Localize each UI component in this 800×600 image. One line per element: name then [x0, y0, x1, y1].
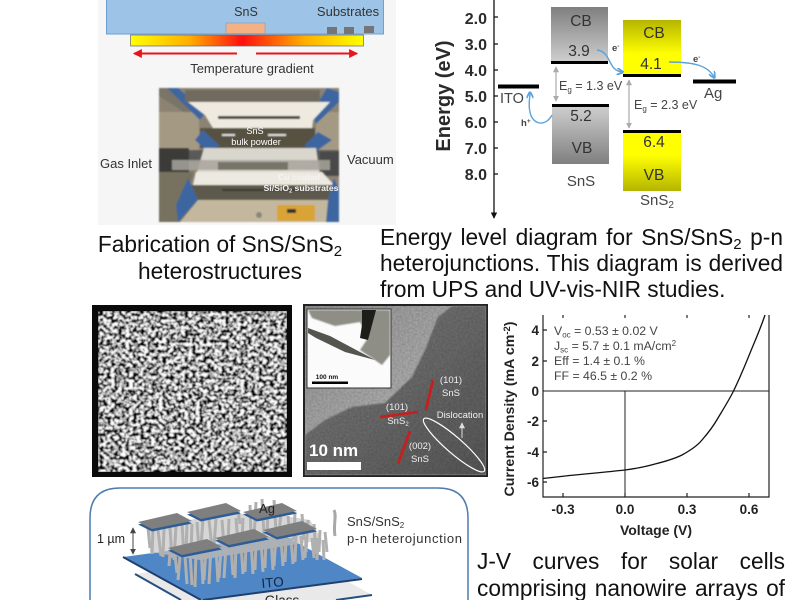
y axis title: -2 [502, 326, 513, 335]
dislocation callout: Dislocation [437, 410, 483, 421]
SnS valence band: 5.2 [570, 108, 592, 125]
axis title: Energy (eV) [433, 40, 455, 152]
photo label: Cu coated substrates: Si/SiO [263, 183, 339, 194]
heater gradient bar [130, 35, 364, 46]
lattice labels [386, 375, 462, 465]
cell parameters: = 5.7 ± 0.1 mA/cm [568, 339, 672, 353]
band gap labels: g [642, 104, 647, 114]
cell parameters: V [554, 324, 562, 338]
ITO level: ITO [500, 91, 524, 107]
lattice labels: (101) [386, 402, 408, 413]
SnS conduction band: CB [570, 13, 592, 30]
y tick labels: -4 [527, 445, 539, 460]
cell parameters [554, 324, 677, 383]
dislocation callout [419, 410, 489, 477]
SnS conduction band [551, 7, 608, 64]
SnS2 valence band: VB [644, 167, 664, 184]
band gap labels: E [559, 79, 567, 93]
SnS2 conduction band: CB [643, 25, 665, 42]
lattice labels: 2 [405, 422, 409, 428]
cell parameters: 2 [672, 339, 677, 348]
SnS source boat [226, 23, 265, 34]
legend: nanowire and heterojunction label: 2 [400, 521, 405, 530]
SnS valence band [552, 104, 609, 164]
SnS valence band: VB [572, 140, 592, 157]
axis tick labels [465, 11, 487, 184]
plot frame [543, 315, 769, 497]
carrier labels: h [521, 118, 527, 129]
x axis title: Voltage (V) [620, 522, 692, 538]
legend: nanowire and heterojunction label: SnS/SnS [347, 514, 405, 530]
TEM inset: nanowire: 100 nm [316, 374, 338, 381]
axis tick labels: 3.0 [465, 37, 487, 54]
cell parameters: Eff = 1.4 ± 0.1 % [554, 354, 645, 368]
carrier labels: e [612, 43, 617, 54]
x tick labels [551, 502, 759, 517]
thickness arrow 1 µm [97, 528, 133, 554]
J-V curve line [543, 315, 765, 478]
panel: device schematic [90, 488, 468, 600]
carrier labels [521, 43, 700, 129]
axis tick labels: 8.0 [465, 167, 487, 184]
ITO layer: ITO [261, 574, 284, 591]
y axis title: ) [502, 321, 518, 326]
lattice labels: SnS [387, 416, 405, 427]
band gap labels [559, 79, 698, 114]
band gap labels: g [567, 86, 572, 94]
chart: J-V curve [502, 315, 769, 538]
label: temperature gradient: Temperature gradient [190, 61, 314, 76]
caption: J-V curves: J-V curves for solar cells [477, 548, 785, 574]
chart: energy level diagram [433, 0, 736, 218]
scale bar 10 nm [307, 441, 361, 470]
x tick labels: 0.3 [678, 502, 697, 517]
legend: nanowire and heterojunction label [334, 510, 462, 546]
caption: fabrication [98, 231, 342, 284]
TEM inset: nanowire [307, 309, 391, 388]
caption: J-V curves [477, 548, 785, 600]
thickness arrow 1 µm: 1 µm [97, 532, 125, 546]
lattice labels: SnS [411, 454, 429, 465]
carrier labels: e [693, 54, 698, 65]
y tick labels: -6 [527, 475, 539, 490]
photo label: Cu coated substrates: 2 [289, 188, 292, 194]
silver contact pads [138, 503, 317, 558]
y tick labels: 2 [531, 354, 539, 369]
lattice labels: (002) [409, 441, 431, 452]
SnS2 label: SnS [640, 192, 668, 209]
Ag level [693, 80, 736, 102]
chamber [106, 0, 384, 34]
axis tick labels: 5.0 [465, 89, 487, 106]
caption: energy level diagram: heterojunctions. This diagram is derived [380, 250, 783, 276]
label: vacuum: Vacuum [347, 152, 394, 167]
caption: fabrication: heterostructures [138, 258, 302, 284]
lattice lines [380, 380, 433, 464]
x tick labels: 0.0 [616, 502, 634, 517]
y tick labels: -2 [527, 414, 539, 429]
cell parameters: = 0.53 ± 0.02 V [571, 324, 659, 338]
x tick labels: 0.6 [740, 502, 759, 517]
energy axis [494, 0, 498, 218]
SnS2 valence band [623, 130, 681, 191]
label: substrates: Substrates [317, 4, 380, 19]
photo label: Cu coated substrates: Cu coated [278, 172, 320, 182]
arrows: temperature gradient [134, 52, 357, 54]
Ag level: Ag [704, 85, 722, 102]
y tick labels [527, 323, 539, 490]
carrier labels: + [527, 118, 531, 125]
substrate blocks [327, 26, 374, 34]
cell parameters: FF = 46.5 ± 0.2 % [554, 369, 652, 383]
label: gas inlet: Gas Inlet [100, 156, 152, 171]
panel: SEM image [92, 305, 292, 477]
panel: TEM image [303, 304, 489, 477]
y tick labels: 4 [531, 323, 539, 338]
band gap arrows [556, 67, 629, 128]
panel: furnace schematic and photo [98, 0, 396, 225]
lattice labels: (101) [440, 375, 462, 386]
SnS2 conduction band: 4.1 [640, 56, 662, 73]
axis tick labels: 4.0 [465, 63, 487, 80]
axis tick labels: 6.0 [465, 115, 487, 132]
SnS2 valence band: 6.4 [643, 134, 665, 151]
cell parameters: sc [560, 346, 568, 354]
photo label: SnS bulk powder: SnS [246, 126, 264, 136]
photo label: SnS bulk powder: bulk powder [231, 137, 281, 147]
ITO layer [123, 535, 362, 600]
label: Ag: Ag [259, 501, 275, 516]
axis tick labels: 2.0 [465, 11, 487, 28]
SnS label: SnS [567, 173, 595, 190]
band gap labels: = 2.3 eV [647, 98, 698, 112]
SnS2 conduction band [623, 20, 681, 77]
caption: energy level diagram [380, 224, 783, 302]
caption: fabrication: Fabrication of SnS/SnS2 [98, 231, 342, 260]
band gap labels: E [634, 98, 642, 112]
caption: energy level diagram: from UPS and UV-vis-NIR studies. [380, 276, 725, 302]
y axis title: Current Density (mA cm [502, 335, 518, 497]
scale bar 10 nm: 10 nm [309, 441, 358, 460]
photo label: Cu coated substrates: substrates [292, 183, 339, 193]
y tick labels: 0 [531, 384, 539, 399]
SnS2 label: 2 [668, 200, 674, 211]
axis tick labels: 7.0 [465, 141, 487, 158]
carrier labels: - [617, 43, 619, 50]
cell parameters: oc [562, 330, 571, 340]
nanowire array [147, 499, 327, 587]
furnace photo [159, 88, 339, 222]
legend: nanowire and heterojunction label: p-n heterojunction [347, 531, 462, 546]
glass layer [135, 552, 372, 600]
carrier transport arrows [529, 50, 714, 123]
caption: energy level diagram: Energy level diagram for SnS/SnS2 p-n [380, 224, 783, 253]
SnS conduction band: 3.9 [568, 43, 590, 60]
carrier labels: - [698, 54, 700, 61]
ITO level [498, 84, 539, 107]
x tick labels: -0.3 [551, 502, 575, 517]
label: SnS source: SnS [234, 5, 258, 19]
cell parameters: J [554, 339, 560, 353]
lattice labels: SnS [442, 388, 460, 399]
band gap labels: = 1.3 eV [572, 79, 623, 93]
